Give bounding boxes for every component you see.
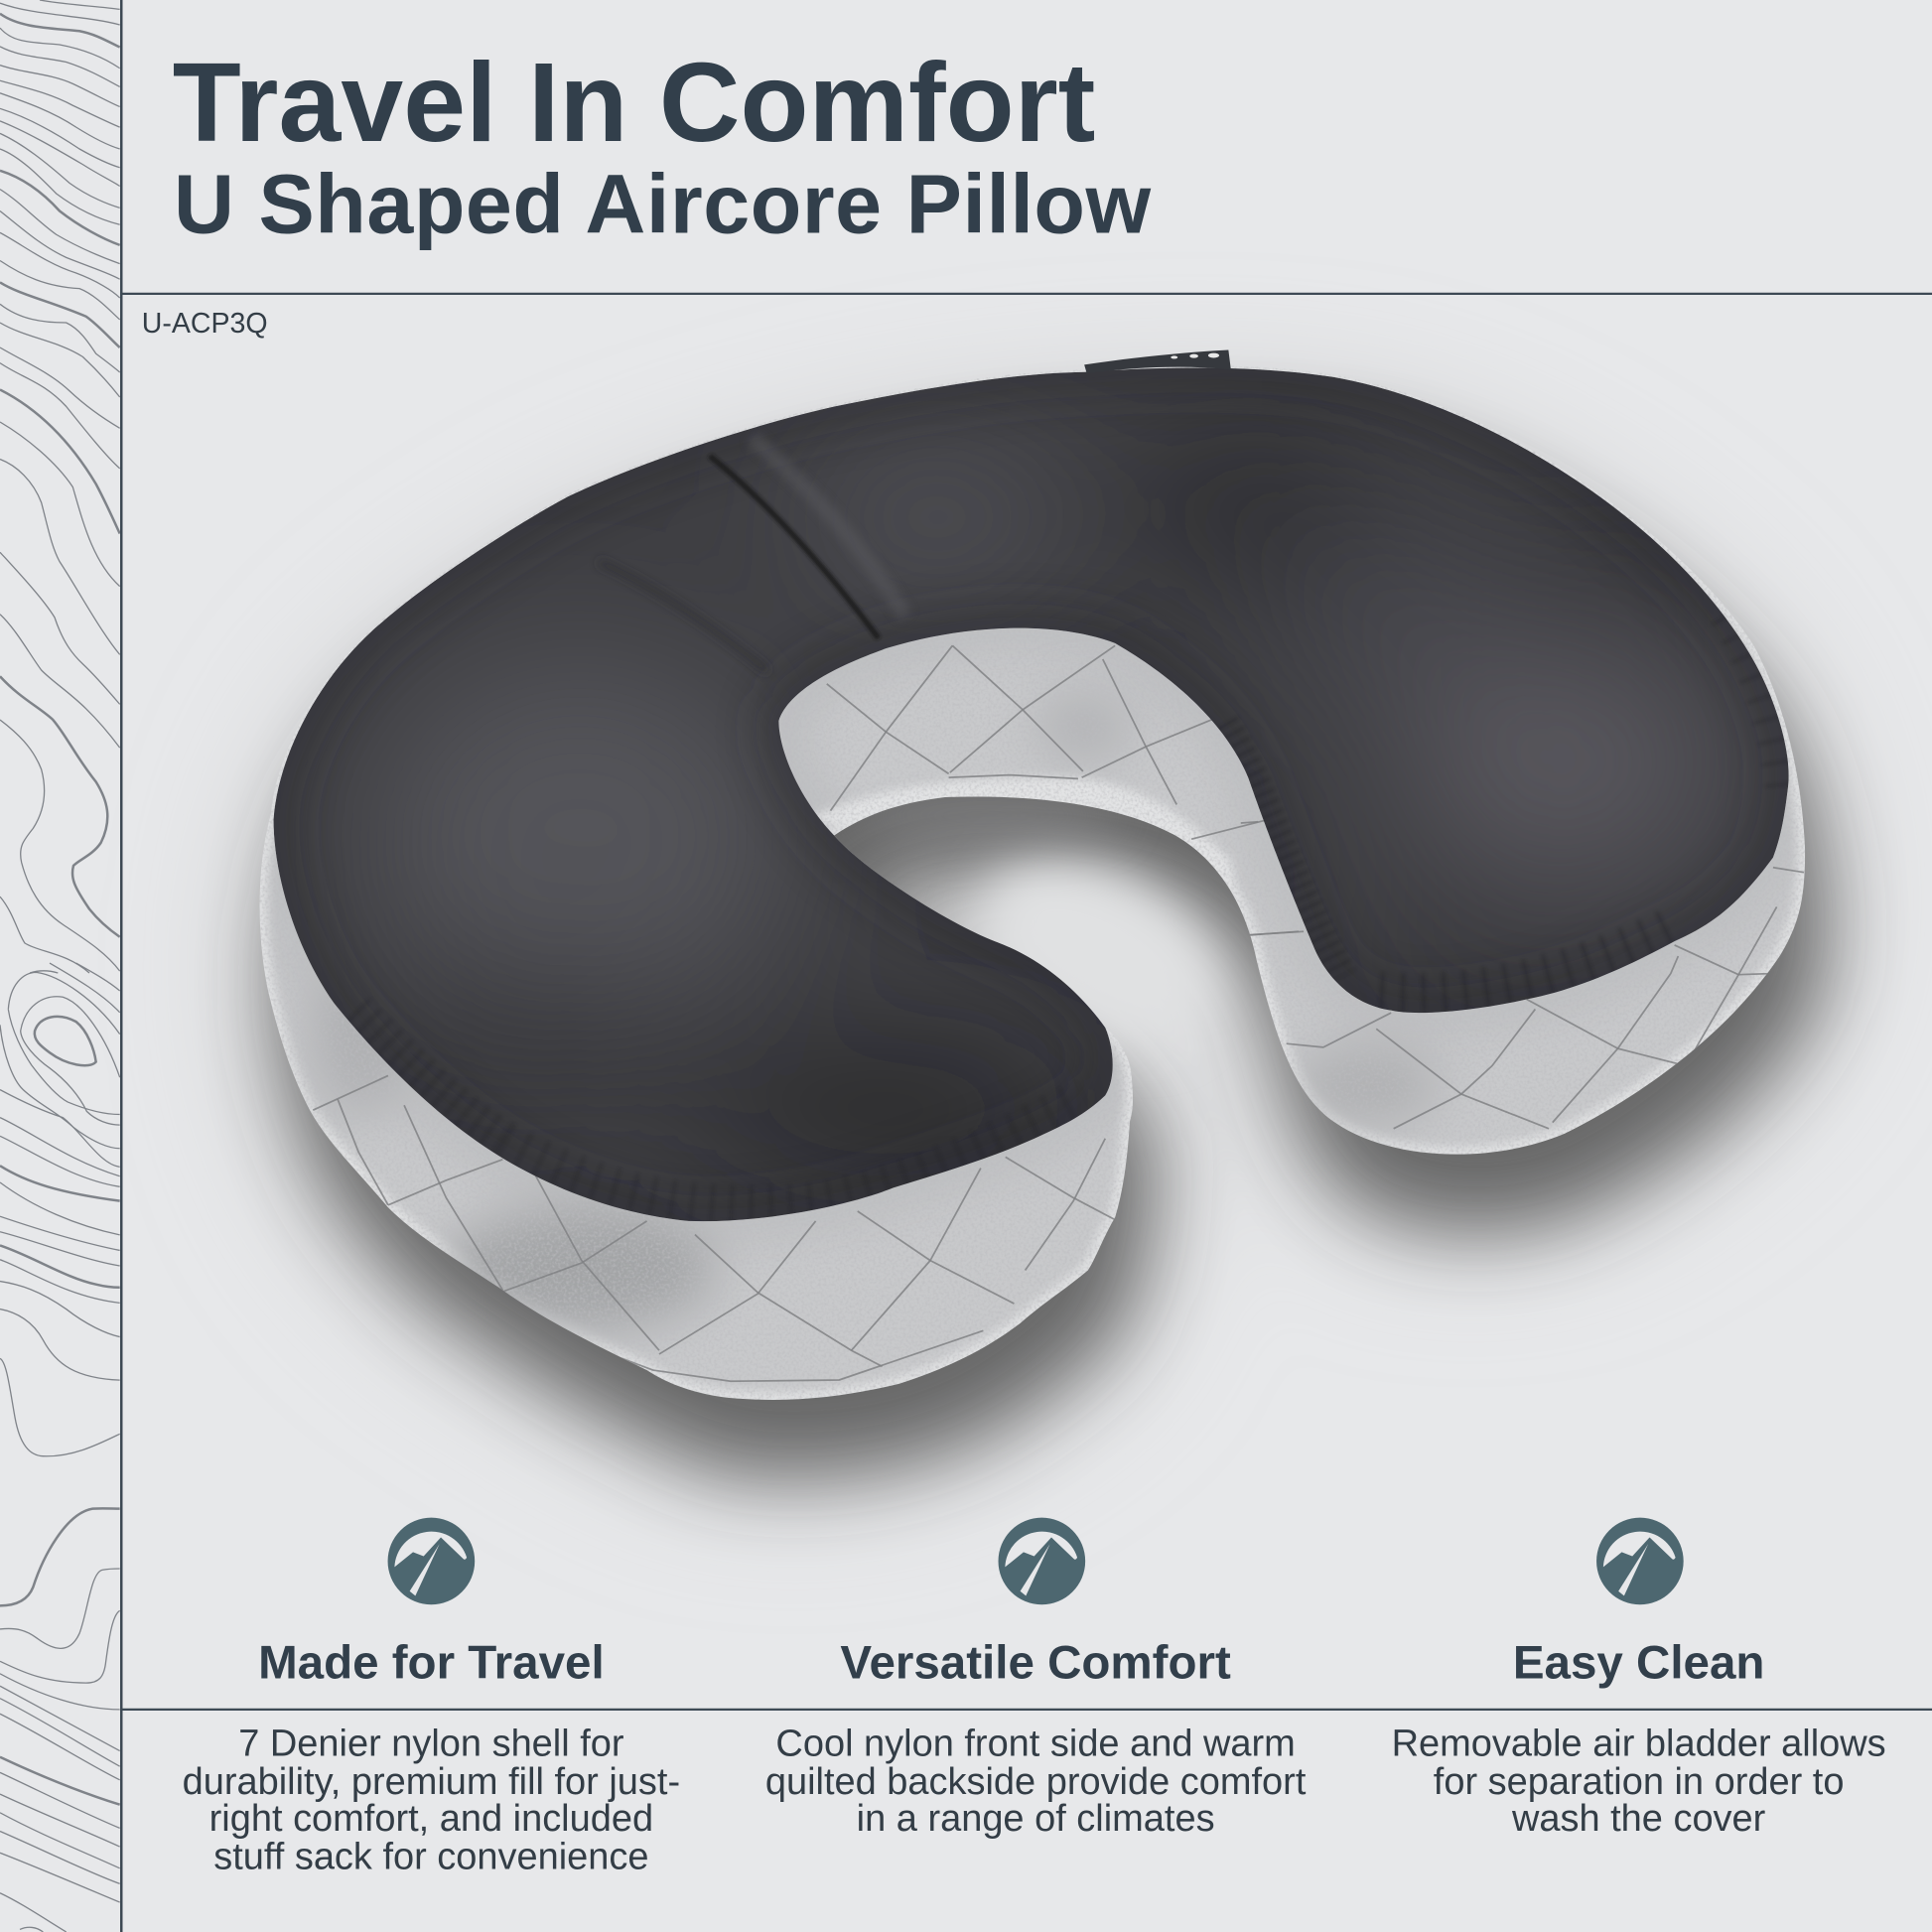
quilted fleece back panel [260, 365, 1805, 1400]
icon: mountain badge 1 [388, 1518, 475, 1604]
frame vertical rule [120, 0, 122, 1932]
footer rule [121, 1709, 1932, 1711]
icon: mountain badge 2 [999, 1518, 1085, 1604]
text block: easy clean: wash the cover [1511, 1798, 1766, 1840]
heading: versatile comfort: Versatile Comfort [840, 1636, 1231, 1689]
text block: easy clean: for separation in order to [1434, 1761, 1844, 1803]
text block: versatile comfort: in a range of climates [857, 1798, 1215, 1840]
title: Travel In Comfort [173, 40, 1095, 165]
subtitle: U Shaped Aircore Pillow [174, 158, 1152, 251]
nylon wrinkles [357, 438, 1780, 1204]
icon: mountain badge 3 [1596, 1518, 1684, 1604]
header rule [121, 293, 1932, 295]
text block: easy clean [1392, 1724, 1886, 1840]
topographic contour strip [0, 0, 120, 1932]
heading: made for travel: Made for Travel [258, 1636, 605, 1689]
u-shaped pillow [260, 349, 1805, 1400]
text block: made for travel: durability, premium fill for just- [183, 1761, 680, 1803]
panel edge shading [274, 367, 1789, 1221]
text block: made for travel [183, 1724, 680, 1878]
text block: versatile comfort: Cool nylon front side and warm [775, 1724, 1296, 1765]
product code: U-ACP3Q [142, 308, 268, 340]
text block: versatile comfort [765, 1724, 1307, 1840]
text block: made for travel: stuff sack for convenience [213, 1837, 649, 1878]
text block: made for travel: right comfort, and included [209, 1798, 653, 1840]
pillow drop shadow [272, 427, 1825, 1476]
text block: easy clean: Removable air bladder allows [1392, 1724, 1886, 1765]
heading: easy clean: Easy Clean [1513, 1636, 1764, 1689]
text block: versatile comfort: quilted backside provide comfort [765, 1761, 1307, 1803]
text block: made for travel: 7 Denier nylon shell for [238, 1724, 624, 1765]
brand tag [1084, 349, 1231, 373]
black nylon front panel [274, 367, 1789, 1221]
quilting seams [313, 645, 1804, 1381]
